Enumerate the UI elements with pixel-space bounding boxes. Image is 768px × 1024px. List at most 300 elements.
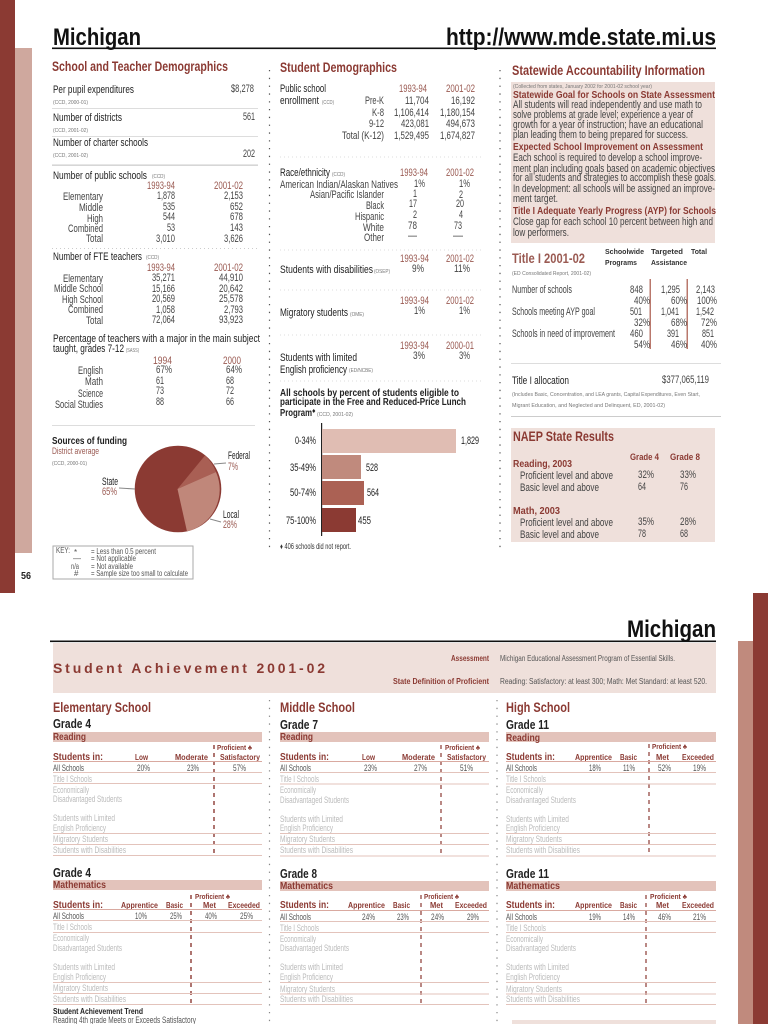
bar chart: free and reduced-price lunch: ♦	[312, 408, 316, 415]
table: grade 8 mathematics: 24%	[362, 912, 375, 922]
table: grade 4 mathematics: Migratory Students	[53, 983, 108, 993]
table: grade 8 mathematics: 24%	[431, 912, 444, 922]
panel: NAEP state results: Proficient level and above	[520, 470, 613, 482]
table: grade 4 mathematics: Economically	[53, 933, 89, 943]
table: grade 4 mathematics: Students in:	[53, 900, 103, 911]
panel: student demographics: 1993-94	[400, 167, 428, 179]
table: grade 8 mathematics: English Proficiency	[280, 972, 333, 982]
table: grade 7 reading: Moderate	[402, 752, 435, 762]
legend key: n/a	[71, 562, 79, 571]
panel: school and teacher demographics: 1,058	[156, 304, 175, 316]
legend key: = Not applicable	[91, 554, 136, 563]
panel: student demographics: enrollment	[280, 95, 319, 107]
table: grade 4 mathematics: Proficient ♣	[195, 892, 230, 901]
table: grade 8 mathematics: Mathematics	[280, 881, 333, 892]
panel: NAEP state results: 35%	[638, 516, 654, 528]
table: grade 7 reading: English Proficiency	[280, 823, 333, 833]
table: grade 11 mathematics: Students with Disabilities	[506, 994, 580, 1004]
panel: school and teacher demographics: 72	[226, 385, 234, 397]
panel: Title I 2001-02: 100%	[697, 295, 717, 307]
table: grade 4 mathematics: Title I Schools	[53, 922, 92, 932]
table: grade 4 mathematics: Basic	[166, 900, 183, 910]
panel: school and teacher demographics: 1,878	[157, 190, 175, 202]
panel: Title I 2001-02: $377,065,119	[662, 374, 709, 386]
panel: student demographics: 1,106,414	[394, 107, 429, 119]
table: grade 11 reading: 19%	[693, 763, 706, 773]
panel: statewide accountability information: Title I Adequate Yearly Progress (AYP) for Schools	[513, 206, 716, 217]
table: grade 11 mathematics: Disadvantaged Students	[506, 943, 576, 953]
bar chart: free and reduced-price lunch: participate in the Free and Reduced-Price Lunch	[280, 397, 466, 408]
panel: Title I 2001-02: Schools in need of improvement	[512, 328, 615, 340]
panel: school and teacher demographics: Math	[85, 376, 103, 388]
table: grade 7 reading: 27%	[414, 763, 427, 773]
table: grade 11 reading: Migratory Students	[506, 834, 562, 844]
panel: student demographics: 1%	[459, 178, 470, 190]
table: grade 11 reading: Reading	[506, 733, 540, 744]
table: grade 8 mathematics: Apprentice	[348, 900, 385, 910]
bar chart: free and reduced-price lunch: 455	[358, 515, 371, 527]
panel: school and teacher demographics: Middle	[79, 202, 103, 214]
bar chart: free and reduced-price lunch: Program	[280, 408, 312, 419]
panel: school and teacher demographics: 2,793	[224, 304, 243, 316]
panel: student demographics: 73	[454, 220, 462, 232]
panel: NAEP state results: Grade 8	[670, 452, 700, 462]
panel: school and teacher demographics: Number of public schools	[53, 170, 147, 182]
panel: student demographics: (OSEP)	[374, 269, 390, 275]
panel: student demographics: Total (K-12)	[342, 130, 384, 142]
table: grade 11 mathematics: Students with Limited	[506, 962, 569, 972]
table: grade 4 reading: Title I Schools	[53, 774, 92, 784]
panel: school and teacher demographics: Total	[86, 233, 103, 245]
legend key: = Sample size too small to calculate	[91, 569, 188, 578]
panel: Title I 2001-02: 2,143	[696, 284, 715, 296]
right page edge bars	[738, 593, 768, 1024]
legend key: = Less than 0.5 percent	[91, 547, 157, 556]
panel: student demographics: 3%	[413, 350, 425, 362]
table: grade 11 mathematics: Students in:	[506, 900, 555, 911]
panel: sources of funding pie chart: 28%	[223, 519, 237, 531]
table: grade 11 mathematics: Migratory Students	[506, 984, 562, 994]
panel: NAEP state results	[511, 428, 715, 542]
panel: student demographics: 1993-94	[400, 340, 429, 352]
panel: school and teacher demographics: 64%	[226, 364, 242, 376]
panel: NAEP state results: Grade 4	[630, 452, 659, 462]
panel: student demographics: (ED/NCBE)	[349, 368, 373, 374]
panel: school and teacher demographics: 3,626	[224, 233, 243, 245]
table: grade 8 mathematics: Grade 8	[280, 867, 317, 881]
panel: student demographics: 2	[459, 189, 463, 201]
panel: Title I 2001-02: Title I allocation	[512, 375, 569, 387]
panel: student achievement banner: Michigan Educational Assessment Program of Essential Skills.	[500, 654, 675, 663]
table: grade 11 mathematics: Apprentice	[575, 900, 612, 910]
panel: student demographics: American Indian/Alaskan Natives	[280, 179, 398, 191]
panel: student demographics: 1993-94	[400, 295, 429, 307]
table: grade 4 mathematics: Students with Disabilities	[53, 994, 126, 1004]
table: grade 11 mathematics: Title I Schools	[506, 923, 546, 933]
panel: school and teacher demographics: 35,271	[152, 272, 175, 284]
panel: student demographics: 17	[409, 198, 417, 210]
panel: student demographics: 4	[459, 209, 463, 221]
bottom panel start	[512, 1020, 716, 1024]
panel: NAEP state results: 68	[680, 528, 688, 540]
panel: student demographics: 423,081	[401, 118, 429, 130]
panel: student demographics: (CCD)	[322, 100, 334, 106]
panel: student demographics: 1,674,827	[440, 130, 475, 142]
table: grade 4 mathematics: 25%	[240, 911, 253, 921]
panel: Title I 2001-02: 68%	[671, 317, 687, 329]
heading: elementary school: Elementary School	[53, 699, 151, 715]
panel: school and teacher demographics: 544	[163, 211, 175, 223]
panel: school and teacher demographics: Percentage of teachers with a major in the main subject	[53, 333, 260, 345]
panel: school and teacher demographics: $8,278	[231, 83, 254, 95]
panel: Title I 2001-02: 501	[630, 306, 642, 318]
panel: Title I 2001-02: 1,041	[661, 306, 679, 318]
panel: Title I 2001-02: 72%	[701, 317, 717, 329]
legend key: = Not available	[91, 562, 133, 571]
panel: school and teacher demographics: 61	[156, 375, 164, 387]
panel: student demographics: 2001-02	[446, 167, 474, 179]
panel: Title I 2001-02: Migrant Education, and Neglected and Delinquent, ED, 2001-02)	[512, 403, 665, 409]
table: grade 11 reading: Exceeded	[682, 752, 714, 762]
table: grade 7 reading: Disadvantaged Students	[280, 795, 349, 805]
panel: school and teacher demographics: 73	[156, 385, 164, 397]
panel: student demographics: Students with limited	[280, 352, 357, 364]
panel: statewide accountability information: (Collected from states, January 2002 for 2001-02 school year)	[513, 84, 652, 90]
table: grade 4 reading: Reading	[53, 732, 86, 743]
panel: school and teacher demographics: taught, grades 7-12	[53, 343, 124, 355]
table: grade 11 mathematics: English Proficiency	[506, 972, 560, 982]
table: grade 7 reading: All Schools	[280, 763, 311, 773]
panel: school and teacher demographics: 88	[156, 396, 164, 408]
table: grade 11 reading: Students in:	[506, 752, 555, 763]
panel: school and teacher demographics: (CCD, 2001-02)	[53, 128, 88, 134]
panel: sources of funding pie chart: (CCD, 2000-01)	[52, 461, 87, 467]
panel: student demographics: 11%	[454, 263, 470, 275]
panel: statewide accountability information: plan leading them to being prepared for success.	[513, 129, 688, 141]
panel: school and teacher demographics: 66	[226, 396, 234, 408]
panel: school and teacher demographics: 15,166	[152, 283, 175, 295]
table: grade 11 mathematics: All Schools	[506, 912, 537, 922]
table: grade 11 reading: English Proficiency	[506, 823, 560, 833]
panel: statewide accountability information: solve problems at grade level; experience a year of	[513, 109, 694, 121]
panel: NAEP state results: Math, 2003	[513, 506, 560, 517]
panel: student demographics: 1,529,495	[394, 130, 429, 142]
panel: Title I 2001-02: (ED Consolidated Report, 2001-02)	[512, 271, 591, 277]
bar chart: free and reduced-price lunch	[280, 388, 479, 551]
panel: student demographics: 2001-02	[446, 253, 474, 265]
table: grade 7 reading: Grade 7	[280, 718, 318, 732]
panel: statewide accountability information: All students will read independently and use math to	[513, 99, 702, 111]
panel: Title I 2001-02	[511, 247, 721, 417]
panel: statewide accountability information: Each school is required to develop a school improve-	[513, 152, 702, 164]
panel: student demographics: 2001-02	[446, 295, 474, 307]
table: grade 4 reading: 20%	[137, 763, 150, 773]
panel: student demographics: 2	[413, 209, 417, 221]
panel: student achievement banner: Reading: Satisfactory: at least 300; Math: Met Standard: at least 520.	[500, 677, 707, 686]
table: grade 7 reading	[280, 718, 489, 856]
panel: Title I 2001-02: 391	[667, 328, 679, 340]
panel: NAEP state results: 28%	[680, 516, 696, 528]
heading: middle school: Middle School	[280, 699, 355, 715]
table: grade 4 reading: Students with Limited	[53, 813, 115, 823]
table: grade 4 reading: 23%	[187, 763, 199, 773]
table: grade 4 mathematics: 25%	[170, 911, 182, 921]
table: grade 4 reading: Students in:	[53, 752, 103, 763]
panel: NAEP state results: NAEP State Results	[513, 428, 614, 444]
panel: school and teacher demographics: 652	[230, 201, 243, 213]
panel: Title I 2001-02: 851	[702, 328, 714, 340]
table: grade 8 mathematics: All Schools	[280, 912, 311, 922]
table: grade 11 reading: Grade 11	[506, 718, 549, 732]
panel: school and teacher demographics	[52, 58, 260, 426]
table: grade 8 mathematics: Met	[430, 900, 443, 910]
table: grade 7 reading: Students in:	[280, 752, 329, 763]
panel: Title I 2001-02: 54%	[634, 339, 650, 351]
table: grade 11 reading: All Schools	[506, 763, 537, 773]
panel: student demographics: Student Demographics	[280, 59, 397, 75]
panel: NAEP state results: 32%	[638, 469, 654, 481]
panel: Title I 2001-02: Programs	[605, 258, 637, 267]
panel: Title I 2001-02: 848	[630, 284, 643, 296]
panel: sources of funding pie chart: State	[102, 476, 118, 488]
panel: student demographics: Other	[364, 232, 384, 244]
table: grade 4 mathematics: All Schools	[53, 911, 84, 921]
panel: student demographics: —	[408, 230, 417, 242]
table: grade 11 mathematics: Mathematics	[506, 881, 560, 892]
panel: school and teacher demographics: 535	[163, 201, 175, 213]
panel: student demographics: Public school	[280, 83, 326, 95]
panel: student demographics: 1%	[414, 178, 425, 190]
panel: school and teacher demographics: (CCD, 2001-02)	[53, 153, 88, 159]
table: grade 8 mathematics: Exceeded	[455, 900, 487, 910]
panel: school and teacher demographics: Per pupil expenditures	[53, 84, 134, 96]
table: grade 4 reading: English Proficiency	[53, 823, 106, 833]
panel: student demographics: Hispanic	[355, 211, 384, 223]
table: grade 8 mathematics: Students with Disabilities	[280, 994, 353, 1004]
table: grade 4 mathematics: Exceeded	[228, 900, 260, 910]
table: grade 4 mathematics: Students with Limited	[53, 962, 115, 972]
panel: school and teacher demographics: 143	[230, 222, 243, 234]
panel: school and teacher demographics: 2,153	[224, 190, 243, 202]
student achievement trend caption	[53, 1007, 196, 1024]
table: grade 11 mathematics: 21%	[693, 912, 706, 922]
table: grade 11 mathematics: 46%	[658, 912, 671, 922]
panel: statewide accountability information: growth for a year of instruction; have an educational	[513, 119, 703, 131]
panel: sources of funding pie chart: Sources of funding	[52, 436, 127, 447]
table: grade 11 reading	[506, 718, 716, 856]
bar chart: free and reduced-price lunch: 564	[367, 487, 379, 499]
panel: school and teacher demographics: (CCD)	[152, 174, 165, 180]
panel: student demographics: Students with disabilities	[280, 264, 373, 276]
panel: student demographics: 1993-94	[400, 253, 429, 265]
panel: school and teacher demographics: 44,910	[219, 272, 243, 284]
page 1 header: http://www.mde.state.mi.us	[446, 24, 716, 51]
panel: school and teacher demographics: 2001-02	[214, 180, 243, 192]
panel: school and teacher demographics: 2000	[223, 355, 241, 367]
table: grade 11 reading: Disadvantaged Students	[506, 795, 576, 805]
table: grade 8 mathematics: Proficient ♣	[424, 892, 459, 901]
table: grade 7 reading: Satisfactory	[447, 752, 486, 762]
panel: school and teacher demographics: 67%	[156, 364, 172, 376]
panel: student demographics	[280, 59, 482, 381]
table: grade 4 mathematics: Met	[203, 900, 216, 910]
legend key: #	[74, 569, 79, 578]
table: grade 7 reading: Low	[362, 752, 375, 762]
panel: sources of funding pie chart: 65%	[102, 486, 117, 498]
table: grade 11 reading: Title I Schools	[506, 774, 546, 784]
panel: school and teacher demographics: Elementary	[63, 273, 103, 285]
panel: student demographics: Migratory students	[280, 307, 348, 319]
panel: school and teacher demographics: 3,010	[156, 233, 175, 245]
panel: school and teacher demographics: 20,569	[152, 293, 175, 305]
table: grade 11 mathematics: Proficient ♣	[650, 892, 687, 901]
table: grade 8 mathematics: Students in:	[280, 900, 329, 911]
panel: school and teacher demographics: English	[78, 365, 103, 377]
panel: Title I 2001-02: Title I 2001-02	[512, 250, 585, 266]
panel: student demographics: 1	[413, 188, 417, 200]
panel: Title I 2001-02: Schools meeting AYP goal	[512, 306, 595, 318]
panel: statewide accountability information: ment target.	[513, 193, 558, 205]
panel: school and teacher demographics: (CCD, 2000-01)	[53, 100, 88, 106]
table: grade 7 reading: Migratory Students	[280, 834, 335, 844]
panel: student demographics: 1%	[459, 305, 470, 317]
panel: Title I 2001-02: 460	[630, 328, 643, 340]
table: grade 4 mathematics: Disadvantaged Students	[53, 943, 122, 953]
table: grade 11 mathematics: Met	[656, 900, 669, 910]
panel: student demographics: 1993-94	[399, 83, 427, 95]
panel: school and teacher demographics: 1993-94	[147, 180, 175, 192]
legend key: KEY:	[56, 546, 70, 555]
table: grade 7 reading: Title I Schools	[280, 774, 319, 784]
panel: Title I 2001-02: Total	[691, 247, 707, 256]
panel: student demographics: 3%	[459, 350, 470, 362]
table: grade 7 reading: 51%	[460, 763, 473, 773]
table: grade 4 reading: Students with Disabilities	[53, 845, 126, 855]
legend key: *	[74, 548, 77, 557]
panel: school and teacher demographics: 2001-02	[214, 262, 243, 274]
panel: school and teacher demographics: Combined	[68, 304, 103, 316]
panel: student demographics: Black	[366, 200, 384, 212]
bar chart: free and reduced-price lunch: 50-74%	[290, 487, 316, 499]
left page edge bars	[0, 0, 32, 593]
table: grade 11 mathematics: 14%	[623, 912, 635, 922]
panel: Title I 2001-02: 1,542	[696, 306, 714, 318]
table: grade 4 reading: Moderate	[175, 752, 208, 762]
panel: Title I 2001-02: Schoolwide	[605, 247, 644, 256]
heading: high school: High School	[506, 699, 570, 715]
panel: student demographics: 9%	[412, 263, 424, 275]
panel: school and teacher demographics: 202	[243, 148, 255, 160]
table: grade 4 mathematics	[53, 866, 262, 1005]
panel: student demographics: 1%	[414, 305, 425, 317]
panel: school and teacher demographics: Total	[86, 315, 103, 327]
panel: student achievement banner: Student Achievement 2001-02	[53, 660, 325, 676]
table: grade 8 mathematics	[280, 867, 489, 1005]
table: grade 11 reading: Students with Disabilities	[506, 845, 580, 855]
panel: school and teacher demographics: Number of districts	[53, 112, 122, 124]
student achievement trend caption: Student Achievement Trend	[53, 1007, 143, 1016]
panel: statewide accountability information: Statewide Goal for Schools on State Assessment	[513, 90, 716, 101]
panel: student demographics: Pre-K	[365, 95, 384, 107]
table: grade 7 reading: Students with Disabilities	[280, 845, 353, 855]
panel: school and teacher demographics: Elementary	[63, 191, 103, 203]
table: grade 11 reading: Students with Limited	[506, 814, 569, 824]
page 1 header: Michigan	[53, 24, 141, 51]
panel: school and teacher demographics: 1994	[153, 355, 172, 367]
table: grade 4 reading: Economically	[53, 785, 89, 795]
table: grade 4 reading	[53, 717, 262, 856]
panel: Title I 2001-02: Targeted	[651, 247, 683, 256]
table: grade 4 mathematics: 40%	[205, 911, 217, 921]
panel: student demographics: 16,192	[451, 95, 475, 107]
panel: student demographics: English proficiency	[280, 364, 347, 376]
table: grade 4 reading: Migratory Students	[53, 834, 108, 844]
table: grade 7 reading: Proficient ♣	[445, 743, 480, 752]
table: grade 8 mathematics: Title I Schools	[280, 923, 319, 933]
panel: sources of funding pie chart: Federal	[228, 450, 250, 462]
panel: student achievement banner: State Definition of Proficient	[393, 676, 489, 686]
panel: Title I 2001-02: 46%	[671, 339, 687, 351]
panel: student demographics: 9-12	[369, 118, 384, 130]
table: grade 7 reading: Economically	[280, 785, 316, 795]
panel: school and teacher demographics: High School	[62, 294, 103, 306]
table: grade 7 reading: 23%	[364, 763, 377, 773]
panel: Title I 2001-02: (Includes Basic, Concentration, and LEA grants, Capital Expenditures, Even Start,	[512, 392, 700, 398]
page number: 56	[21, 571, 31, 582]
table: grade 4 reading: Proficient ♣	[217, 743, 252, 752]
panel: school and teacher demographics: 68	[226, 375, 234, 387]
table: grade 8 mathematics: 29%	[467, 912, 479, 922]
table: grade 11 reading: 52%	[658, 763, 671, 773]
table: grade 4 mathematics: English Proficiency	[53, 972, 106, 982]
panel: student demographics: —	[453, 230, 463, 242]
bar chart: free and reduced-price lunch: ♦ 406 schools did not report.	[280, 542, 351, 551]
panel: NAEP state results: Reading, 2003	[513, 459, 572, 470]
bar chart: free and reduced-price lunch: All schools by percent of students eligible to	[280, 388, 459, 399]
bar chart: free and reduced-price lunch: 528	[366, 462, 378, 474]
panel: Title I 2001-02: Assistance	[651, 258, 687, 267]
table: grade 8 mathematics: Migratory Students	[280, 984, 335, 994]
page 1 header	[52, 24, 716, 51]
table: grade 8 mathematics: Basic	[393, 900, 410, 910]
table: grade 8 mathematics: Students with Limited	[280, 962, 343, 972]
table: grade 4 reading: Disadvantaged Students	[53, 794, 122, 804]
panel: NAEP state results: Basic level and above	[520, 529, 599, 541]
panel: student demographics: (CCD)	[332, 172, 345, 178]
panel: student demographics: 78	[408, 220, 417, 232]
table: grade 11 reading: Apprentice	[575, 752, 612, 762]
panel: student demographics: 20	[456, 198, 464, 210]
table: grade 8 mathematics: 23%	[397, 912, 409, 922]
panel: student demographics: 11,704	[405, 95, 429, 107]
panel: school and teacher demographics: 93,923	[219, 314, 243, 326]
panel: school and teacher demographics: 561	[243, 111, 255, 123]
panel: sources of funding pie chart: 7%	[228, 461, 238, 473]
panel: NAEP state results: 64	[638, 481, 646, 493]
panel: student demographics: (OME)	[350, 312, 364, 318]
panel: school and teacher demographics: 1993-94	[147, 262, 175, 274]
table: grade 8 mathematics: Economically	[280, 934, 316, 944]
panel: student achievement banner	[53, 643, 716, 693]
table: grade 11 mathematics: 19%	[589, 912, 601, 922]
table: grade 11 reading: Economically	[506, 785, 543, 795]
table: grade 11 reading: Basic	[620, 752, 637, 762]
table: grade 4 reading: Low	[135, 752, 148, 762]
panel: student demographics: Asian/Pacific Islander	[310, 189, 384, 201]
panel: Title I 2001-02: 40%	[634, 295, 650, 307]
panel: student achievement banner: Assessment	[451, 653, 489, 663]
table: grade 11 mathematics: Exceeded	[682, 900, 714, 910]
